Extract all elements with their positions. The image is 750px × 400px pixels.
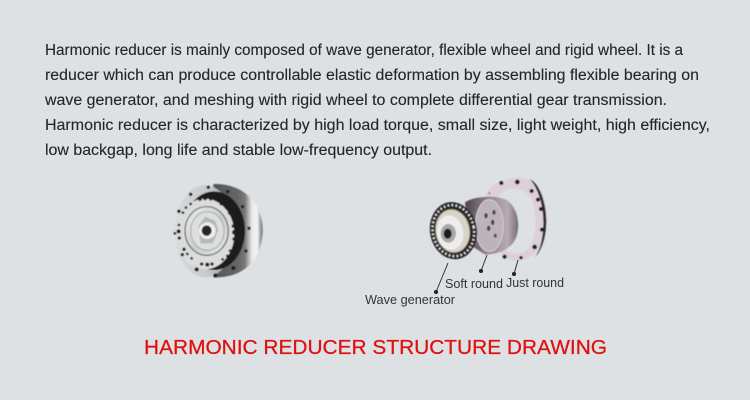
soft wheel <box>465 197 518 254</box>
wave generator <box>425 198 481 263</box>
image: assembled harmonic reducer <box>174 184 263 277</box>
label: soft round: Soft round <box>445 276 503 291</box>
description paragraph: wave generator, and meshing with rigid wheel to complete differential gear transmission. <box>44 92 667 109</box>
image: exploded harmonic reducer <box>365 178 564 307</box>
label: just round: Just round <box>506 275 564 290</box>
description paragraph: Harmonic reducer is mainly composed of wave generator, flexible wheel and rigid wheel. It is a <box>45 42 683 59</box>
rigid wheel <box>486 178 547 261</box>
description paragraph <box>44 42 710 159</box>
description paragraph: reducer which can produce controllable elastic deformation by assembling flexible bearing on <box>45 67 699 84</box>
leader lines <box>434 255 518 294</box>
label: wave generator: Wave generator <box>365 292 456 307</box>
description paragraph: Harmonic reducer is characterized by high load torque, small size, light weight, high efficiency, <box>45 117 710 134</box>
caption: HARMONIC REDUCER STRUCTURE DRAWING <box>144 336 607 359</box>
description paragraph: low backgap, long life and stable low-frequency output. <box>45 142 432 159</box>
